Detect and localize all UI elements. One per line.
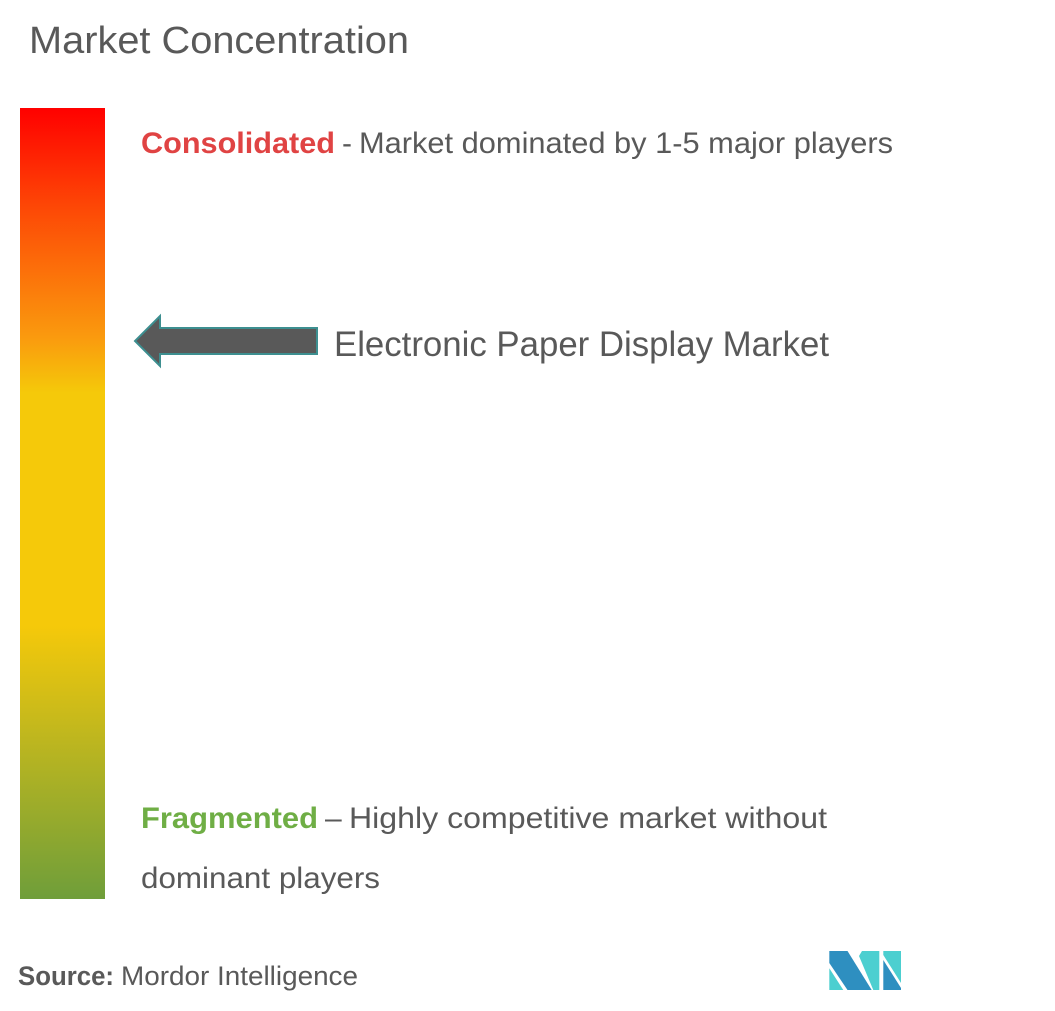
fragmented description: dominant players: [141, 862, 380, 895]
fragmented description: –: [325, 802, 342, 835]
consolidated description: [141, 127, 893, 160]
source line: Mordor Intelligence: [121, 961, 358, 991]
gradient concentration scale: [20, 108, 105, 899]
arrow pointing to market position: [135, 316, 317, 366]
market label: Electronic Paper Display Market: [334, 325, 829, 364]
consolidated description: Consolidated: [141, 127, 335, 160]
fragmented description: Highly competitive market without: [349, 802, 828, 835]
source line: Source:: [18, 961, 114, 991]
fragmented description: Fragmented: [141, 802, 318, 835]
title: Market Concentration: [29, 20, 409, 62]
consolidated description: -: [342, 127, 352, 160]
icon: Mordor Intelligence logo: [829, 951, 901, 990]
fragmented description: [141, 802, 828, 895]
consolidated description: Market dominated by 1-5 major players: [359, 127, 893, 160]
source line: [18, 961, 358, 991]
